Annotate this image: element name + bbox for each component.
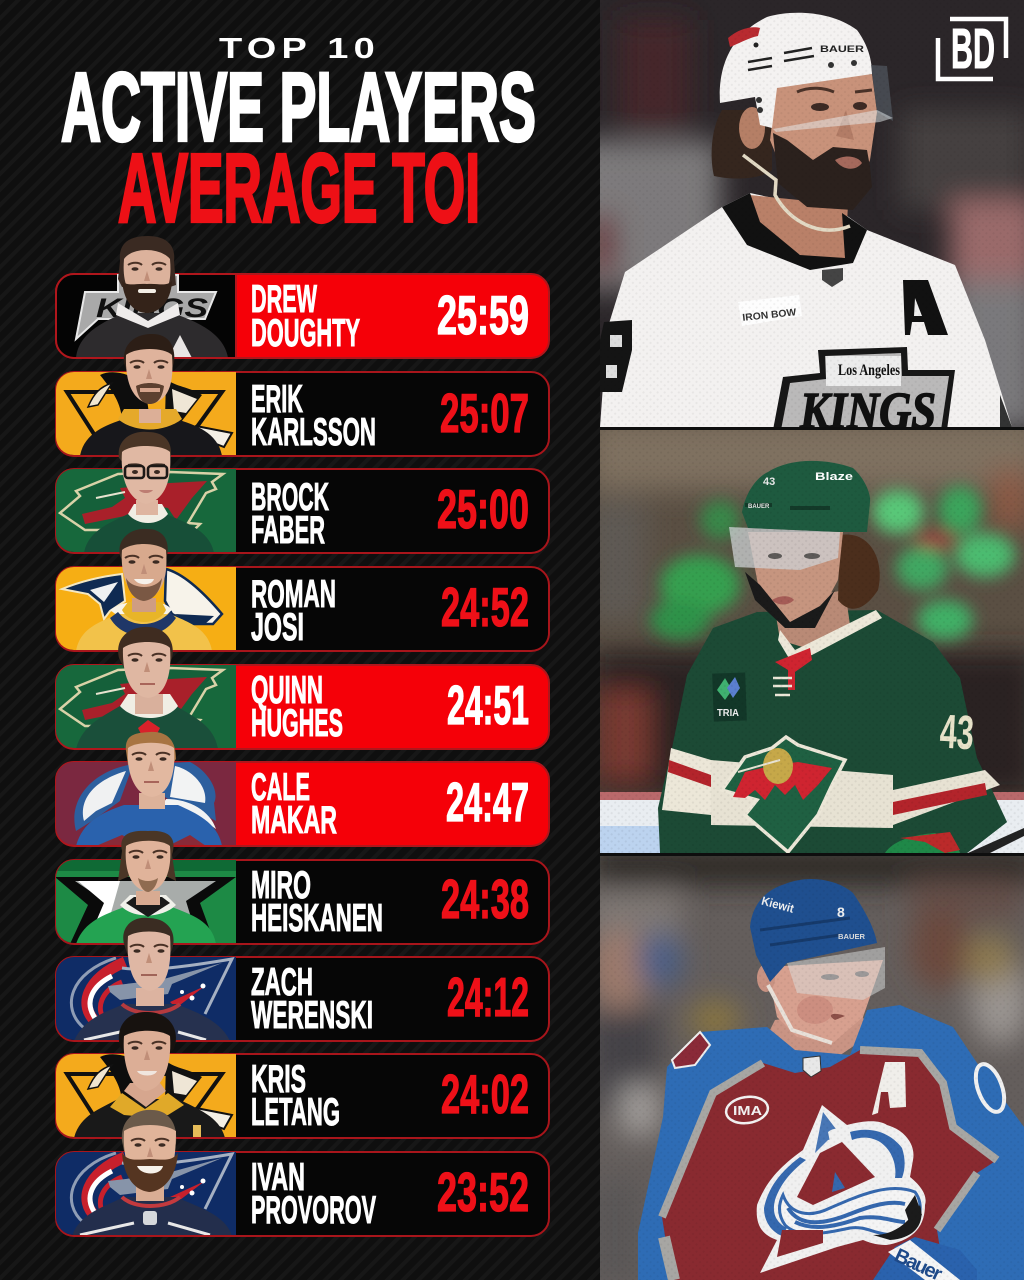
heading: average toi: AVERAGE TOI — [118, 134, 480, 242]
nhl shield — [803, 1056, 821, 1077]
stripes — [662, 748, 711, 815]
title block — [61, 33, 536, 242]
grey stripes — [662, 1063, 763, 1217]
collar — [722, 193, 867, 270]
avalanche crest — [757, 1105, 926, 1273]
photo: Drew Doughty: BAUER — [820, 44, 865, 54]
row 7: Miro Heiskanen: HEISKANEN — [251, 897, 383, 940]
photo: Brock Faber: 43 — [763, 476, 775, 488]
row 8: Zach Werenski: WERENSKI — [251, 994, 373, 1037]
chin strap — [743, 155, 850, 230]
neck — [765, 1010, 870, 1062]
A patch — [903, 280, 948, 335]
photo: Ivan Provorov: 8 — [837, 904, 845, 920]
jersey sleeves and yoke — [638, 1005, 1024, 1280]
row 7: Miro Heiskanen — [55, 831, 549, 944]
glove — [873, 1237, 977, 1280]
row 3: Brock Faber — [55, 432, 549, 553]
time: 24:12 — [447, 966, 529, 1028]
row 1: Drew Doughty: KINGS — [96, 293, 208, 323]
photo: Brock Faber: BAUER — [748, 504, 770, 510]
name: ZACH — [251, 961, 313, 1004]
name: KRIS — [251, 1058, 306, 1101]
heading: top 10: TOP 10 — [219, 33, 380, 65]
photo: Drew Doughty: Los Angeles — [838, 362, 900, 379]
heading: active players: ACTIVE PLAYERS — [61, 52, 536, 162]
hair — [838, 534, 880, 609]
row 6: Cale Makar: MAKAR — [251, 799, 337, 842]
name: IVAN — [251, 1156, 305, 1199]
row 9: Kris Letang: LETANG — [251, 1091, 340, 1134]
ice boards — [600, 800, 1024, 855]
name: BROCK — [251, 476, 329, 519]
row 4: Roman Josi — [55, 529, 549, 651]
row 1: Drew Doughty — [56, 236, 549, 358]
neck — [750, 195, 848, 258]
facial features — [797, 88, 872, 92]
face — [748, 532, 843, 622]
jersey — [658, 610, 1007, 853]
jersey — [600, 193, 1012, 427]
collar — [745, 1030, 795, 1072]
hair — [712, 110, 772, 178]
tria patch — [712, 672, 747, 722]
helmet — [750, 879, 877, 982]
time: 23:52 — [437, 1161, 529, 1223]
visor — [729, 527, 840, 570]
helmet — [742, 461, 870, 532]
time: 24:02 — [441, 1063, 529, 1125]
photo: Brock Faber: TRIA — [717, 708, 739, 719]
name: MIRO — [251, 864, 311, 907]
time: 25:07 — [440, 382, 529, 444]
time: 25:59 — [437, 284, 529, 346]
row 3: Brock Faber: FABER — [251, 509, 325, 552]
background panel — [0, 0, 600, 1280]
photo: Drew Doughty: IRON BOW — [742, 307, 797, 324]
visor — [787, 947, 885, 1000]
face — [770, 74, 877, 162]
A patch — [872, 1062, 906, 1115]
sleeve numbers — [672, 1032, 710, 1068]
row 8: Zach Werenski — [55, 918, 549, 1041]
name: DREW — [251, 278, 317, 321]
wild crest — [722, 737, 845, 852]
kings crest — [773, 347, 955, 430]
ima patch — [724, 1094, 770, 1126]
row 5: Quinn Hughes: HUGHES — [251, 702, 343, 745]
row 2: Erik Karlsson: KARLSSON — [251, 411, 376, 454]
visor — [871, 65, 893, 121]
row 4: Roman Josi: JOSI — [251, 606, 304, 649]
photo: Ivan Provorov — [590, 846, 1024, 1280]
name: ROMAN — [251, 573, 336, 616]
name: ERIK — [251, 378, 303, 421]
photo: Ivan Provorov: IMA — [733, 1103, 763, 1118]
row 9: Kris Letang — [55, 1012, 549, 1138]
face — [767, 960, 883, 1043]
row 1: Drew Doughty: DOUGHTY — [251, 312, 360, 355]
name: QUINN — [251, 669, 323, 712]
photo: Ivan Provorov: BAUER — [838, 934, 865, 941]
row 2: Erik Karlsson — [55, 334, 549, 456]
row 5: Quinn Hughes — [55, 627, 549, 749]
time: 24:51 — [447, 674, 529, 736]
photo: Brock Faber: Blaze — [815, 471, 853, 483]
sleeve number — [600, 320, 632, 392]
nhl shield — [822, 268, 843, 287]
glove — [885, 833, 960, 853]
sponsor patch — [738, 295, 802, 326]
time: 25:00 — [437, 478, 529, 540]
collar — [778, 610, 882, 660]
number: 43 — [938, 706, 975, 760]
name: CALE — [251, 766, 310, 809]
photo: Drew Doughty — [570, 0, 1024, 440]
neck — [775, 590, 850, 650]
row 10: Ivan Provorov: PROVOROV — [251, 1189, 376, 1232]
photo: Ivan Provorov: Kiewit — [760, 894, 795, 916]
row 10: Ivan Provorov — [55, 1110, 549, 1236]
jersey body — [662, 1050, 997, 1280]
logo: BD — [938, 17, 1006, 81]
beard — [773, 133, 872, 210]
photo: Drew Doughty: KINGS — [799, 383, 936, 440]
time: 24:47 — [446, 771, 529, 833]
sleeve lower — [967, 822, 1007, 853]
chin strap — [768, 985, 832, 1043]
time: 24:38 — [441, 868, 529, 930]
time: 24:52 — [441, 576, 529, 638]
row 6: Cale Makar — [55, 732, 549, 846]
photo: Brock Faber — [590, 420, 1024, 855]
helmet — [720, 13, 872, 128]
